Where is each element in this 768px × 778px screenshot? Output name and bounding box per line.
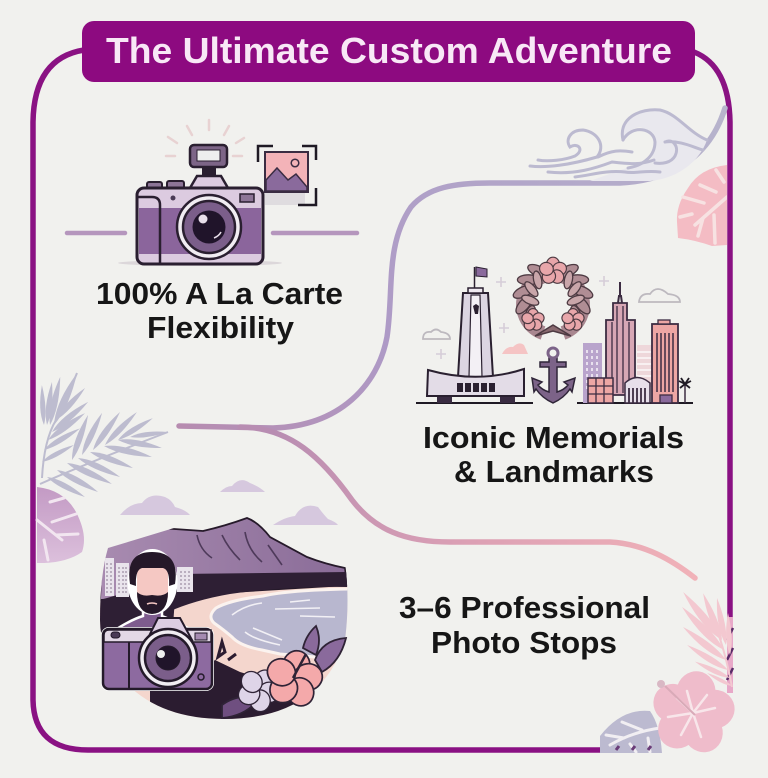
clouds and sparkles (423, 276, 680, 359)
decoration: waves (530, 110, 707, 181)
flowers and leaves (222, 626, 346, 722)
decoration: lavender palm left (39, 372, 168, 499)
decoration: pink monstera leaf top right (677, 165, 727, 246)
text: a la carte flexibility: Flexibility (147, 310, 295, 345)
text: a la carte flexibility: 100% A La Carte (96, 276, 343, 311)
icon: memorials and landmarks (416, 257, 693, 403)
scene (95, 518, 355, 725)
wreath (511, 257, 595, 336)
front camera (101, 618, 214, 691)
skyline (577, 282, 693, 403)
decoration: purple monstera left (37, 487, 84, 563)
connector: upper branch to landmarks (179, 108, 725, 428)
text: iconic memorials: Iconic Memorials (423, 420, 684, 455)
anchor (532, 348, 575, 403)
decoration: lavender monstera bottom right (600, 711, 662, 753)
icon: flexibility camera with photo (67, 120, 357, 266)
text: professional photo stops (399, 590, 650, 660)
side lines (67, 231, 357, 235)
title: The Ultimate Custom Adventure (106, 30, 672, 71)
text: professional photo stops: Photo Stops (431, 625, 617, 660)
icon: diamond head beach photographer (95, 518, 355, 725)
text: professional photo stops: 3–6 Professional (399, 590, 650, 625)
icon: clouds above diamond head (120, 480, 338, 525)
text: iconic memorials: & Landmarks (454, 454, 654, 489)
title banner (82, 21, 695, 82)
connector: lower branch to photo stops (240, 427, 695, 578)
text: a la carte flexibility (96, 276, 343, 345)
photographer (112, 549, 195, 632)
decoration: pink palm bottom right (679, 590, 733, 693)
text: iconic memorials (423, 420, 684, 489)
memorial (416, 267, 533, 403)
decoration: pink hibiscus bottom right (641, 665, 744, 764)
